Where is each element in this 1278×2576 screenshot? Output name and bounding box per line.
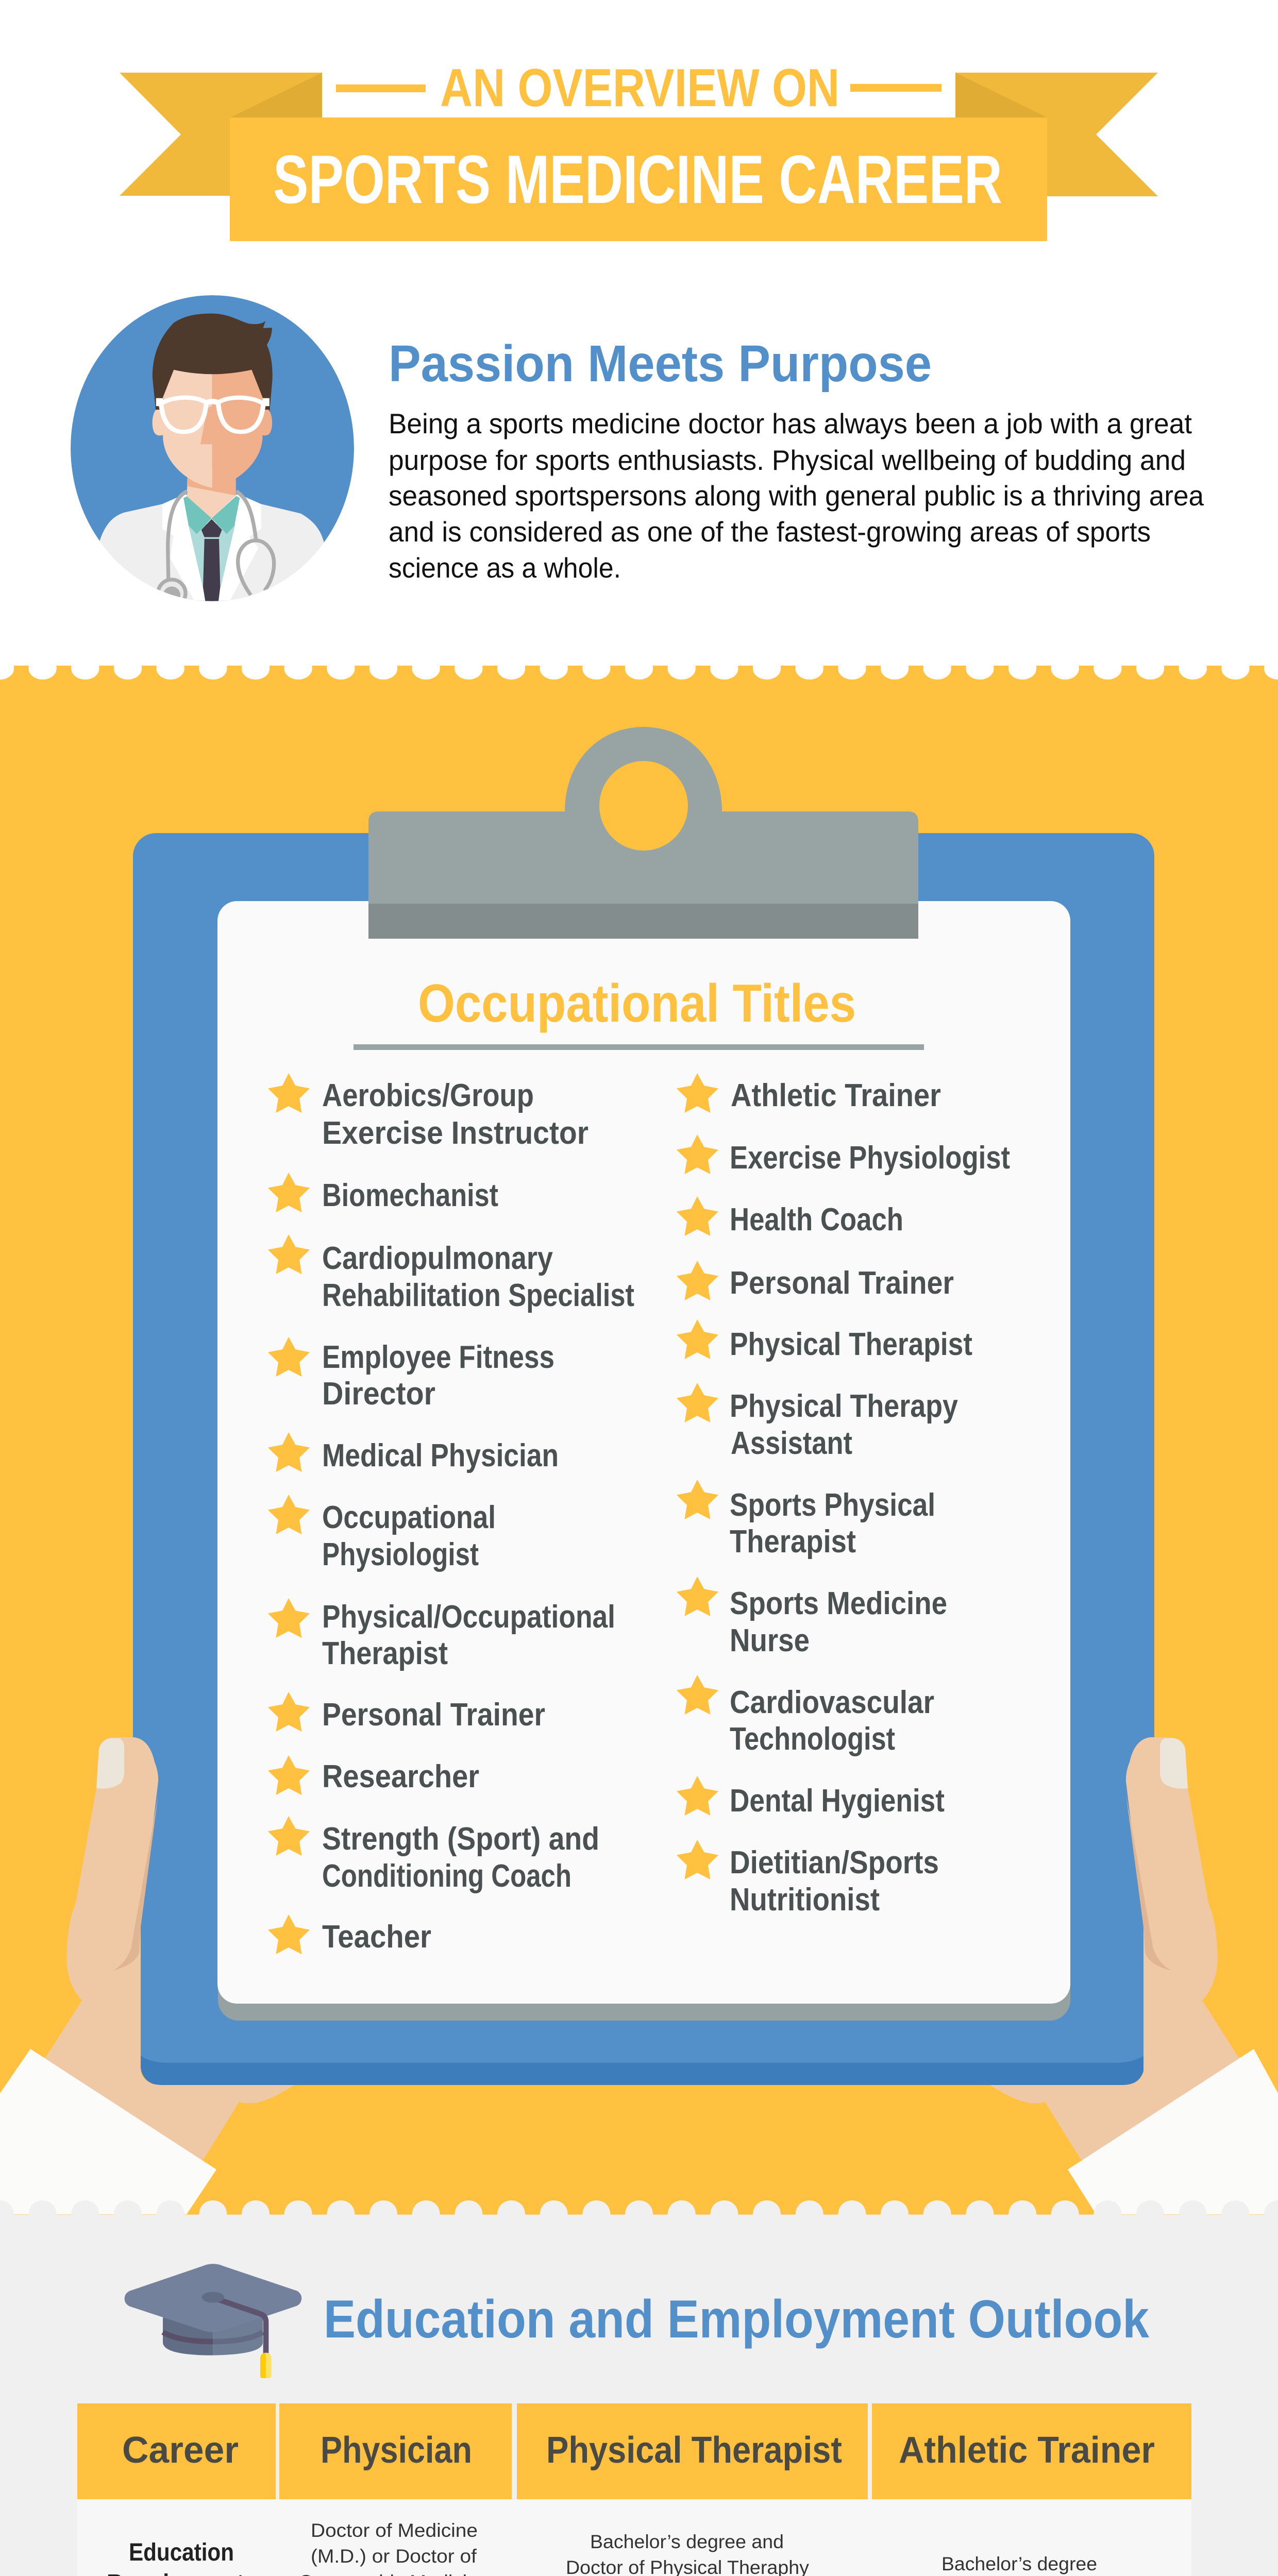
item: Aerobics: Exercise Instructor [322,1115,588,1151]
left sleeve [0,2049,216,2214]
row: education requirements: (M.D.) or Doctor of [311,2546,477,2567]
icon: graduation cap [125,2264,301,2378]
right sleeve [1068,2049,1278,2214]
item: Physical Therapist [677,1319,972,1362]
table header row: Career [122,2430,239,2471]
item: Strength and Conditioning Coach [268,1816,599,1894]
item: Medical Physician [268,1432,559,1473]
title banner [120,58,1158,241]
item: Occupational Physiologist [268,1495,496,1572]
left hand holding clipboard [0,1737,294,2214]
table header row: Physician [321,2430,472,2471]
clipboard board [133,833,1154,2085]
item: Exercise Physiologist: Exercise Physiologist [730,1140,1010,1176]
item: Athletic Trainer [677,1073,941,1113]
row: education requirements: Bachelor’s degree and [590,2531,784,2552]
item: Biomechanist: Biomechanist [322,1178,498,1213]
heading: Passion Meets Purpose: Passion Meets Purpose [389,335,932,393]
ribbon tails [120,73,1158,196]
item: Cardiovascular Technologist: Technologist [730,1721,895,1757]
item: Physical Therapy Assistant [677,1383,958,1461]
table header row [77,2403,1191,2499]
heading: Education and Employment Outlook: Education and Employment Outlook [324,2290,1149,2349]
metal clip [368,727,918,939]
body paragraph: Being a sports medicine doctor has always been a job with a great [389,408,1192,439]
row: education requirements [107,2520,1097,2576]
table header row: Physical Therapist [546,2430,842,2471]
item: Dietitian/Sports Nutritionist: Dietitian/Sports [730,1845,939,1880]
item: Cardiopulmonary: Cardiopulmonary [322,1241,553,1276]
item: Dental Hygienist [677,1776,945,1819]
heading: Occupational Titles: Occupational Titles [418,974,856,1033]
body paragraph: seasoned sportspersons along with general public is a thriving area [389,480,1204,512]
item: Personal Trainer: Personal Trainer [730,1265,954,1301]
doctor body [100,467,324,601]
panel: education and employment outlook [0,2200,1278,2576]
item: Occupational Physiologist: Occupational [322,1500,496,1535]
item: Dental Hygienist: Dental Hygienist [730,1783,945,1819]
item: Physical Therapy Assistant: Assistant [731,1426,852,1461]
item: Employee Fitness [268,1337,554,1412]
item: Physical Therapist: Physical Therapist [730,1327,972,1362]
item: Exercise Physiologist [677,1134,1010,1176]
main title: SPORTS MEDICINE CAREER [273,142,1002,218]
body paragraph: science as a whole. [389,552,621,584]
item: Cardiopulmonary [268,1234,634,1313]
heading rule [354,1044,924,1050]
item: Medical Physician: Medical Physician [322,1438,559,1473]
item: Sports Medicine Nurse: Sports Medicine [730,1586,947,1621]
item: Employee Fitness: Director [322,1376,435,1412]
row: education requirements: Bachelor’s degree [941,2553,1097,2574]
item: Physical/Occupational Therapist: Physical/Occupational [322,1599,615,1635]
career comparison table [77,2403,1191,2576]
item: Sports Medicine Nurse [677,1577,947,1658]
item: Athletic Trainer: Athletic Trainer [731,1078,941,1113]
item: Teacher: Teacher [322,1919,431,1955]
item: Personal Trainer: Personal Trainer [322,1697,545,1733]
item: Cardiopulmonary: Rehabilitation Specialist [322,1278,634,1313]
item: Aerobics: Aerobics/Group [322,1078,534,1113]
clipboard [133,727,1154,2085]
item: Strength and Conditioning Coach: Strength (Sport) and [322,1821,599,1857]
item: Researcher: Researcher [322,1759,479,1794]
row: education requirements: Education [129,2539,234,2566]
item: Biomechanist [268,1173,498,1213]
icon: doctor portrait [71,295,354,607]
paper [217,901,1070,2021]
body paragraph: and is considered as one of the fastest-growing areas of sports [389,516,1151,548]
item: Dietitian/Sports Nutritionist: Nutritionist [730,1882,880,1918]
item: Aerobics [268,1073,588,1151]
item: Personal Trainer [677,1261,954,1301]
item: Strength and Conditioning Coach: Conditioning Coach [322,1858,571,1894]
item: Sports Physical Therapist: Sports Physical [730,1487,935,1523]
item: Health Coach: Health Coach [730,1202,903,1238]
item: Physical/Occupational Therapist [268,1598,615,1671]
item: Teacher [268,1914,431,1955]
item: Sports Medicine Nurse: Nurse [730,1623,810,1658]
item: Employee Fitness: Employee Fitness [322,1340,554,1375]
doctor head [153,314,273,488]
intro text block [389,335,1204,584]
item: Occupational Physiologist: Physiologist [322,1537,479,1572]
row: education requirements: Doctor of Medicine [311,2520,478,2541]
right hand holding clipboard [990,1737,1278,2214]
item: Dietitian/Sports Nutritionist [677,1840,939,1918]
occupational titles list [268,974,1010,1955]
item: Sports Physical Therapist: Therapist [730,1524,856,1560]
table body background [77,2499,1191,2576]
item: Researcher [268,1755,479,1795]
item: Cardiovascular Technologist [677,1675,934,1757]
body paragraph [389,408,1204,584]
item: Physical Therapy Assistant: Physical Therapy [730,1388,958,1424]
body paragraph: purpose for sports enthusiasts. Physical wellbeing of budding and [389,444,1186,476]
item: Health Coach [677,1196,903,1238]
item: Sports Physical Therapist [677,1480,935,1560]
table header row: Athletic Trainer [899,2430,1155,2471]
item: Personal Trainer [268,1692,545,1733]
ribbon main panel [230,117,1047,241]
item: Physical/Occupational Therapist: Therapist [322,1636,448,1671]
item: Cardiovascular Technologist: Cardiovascular [730,1685,934,1720]
panel: occupational titles background [0,666,1278,2216]
overline text with side rules: AN OVERVIEW ON [440,58,839,118]
